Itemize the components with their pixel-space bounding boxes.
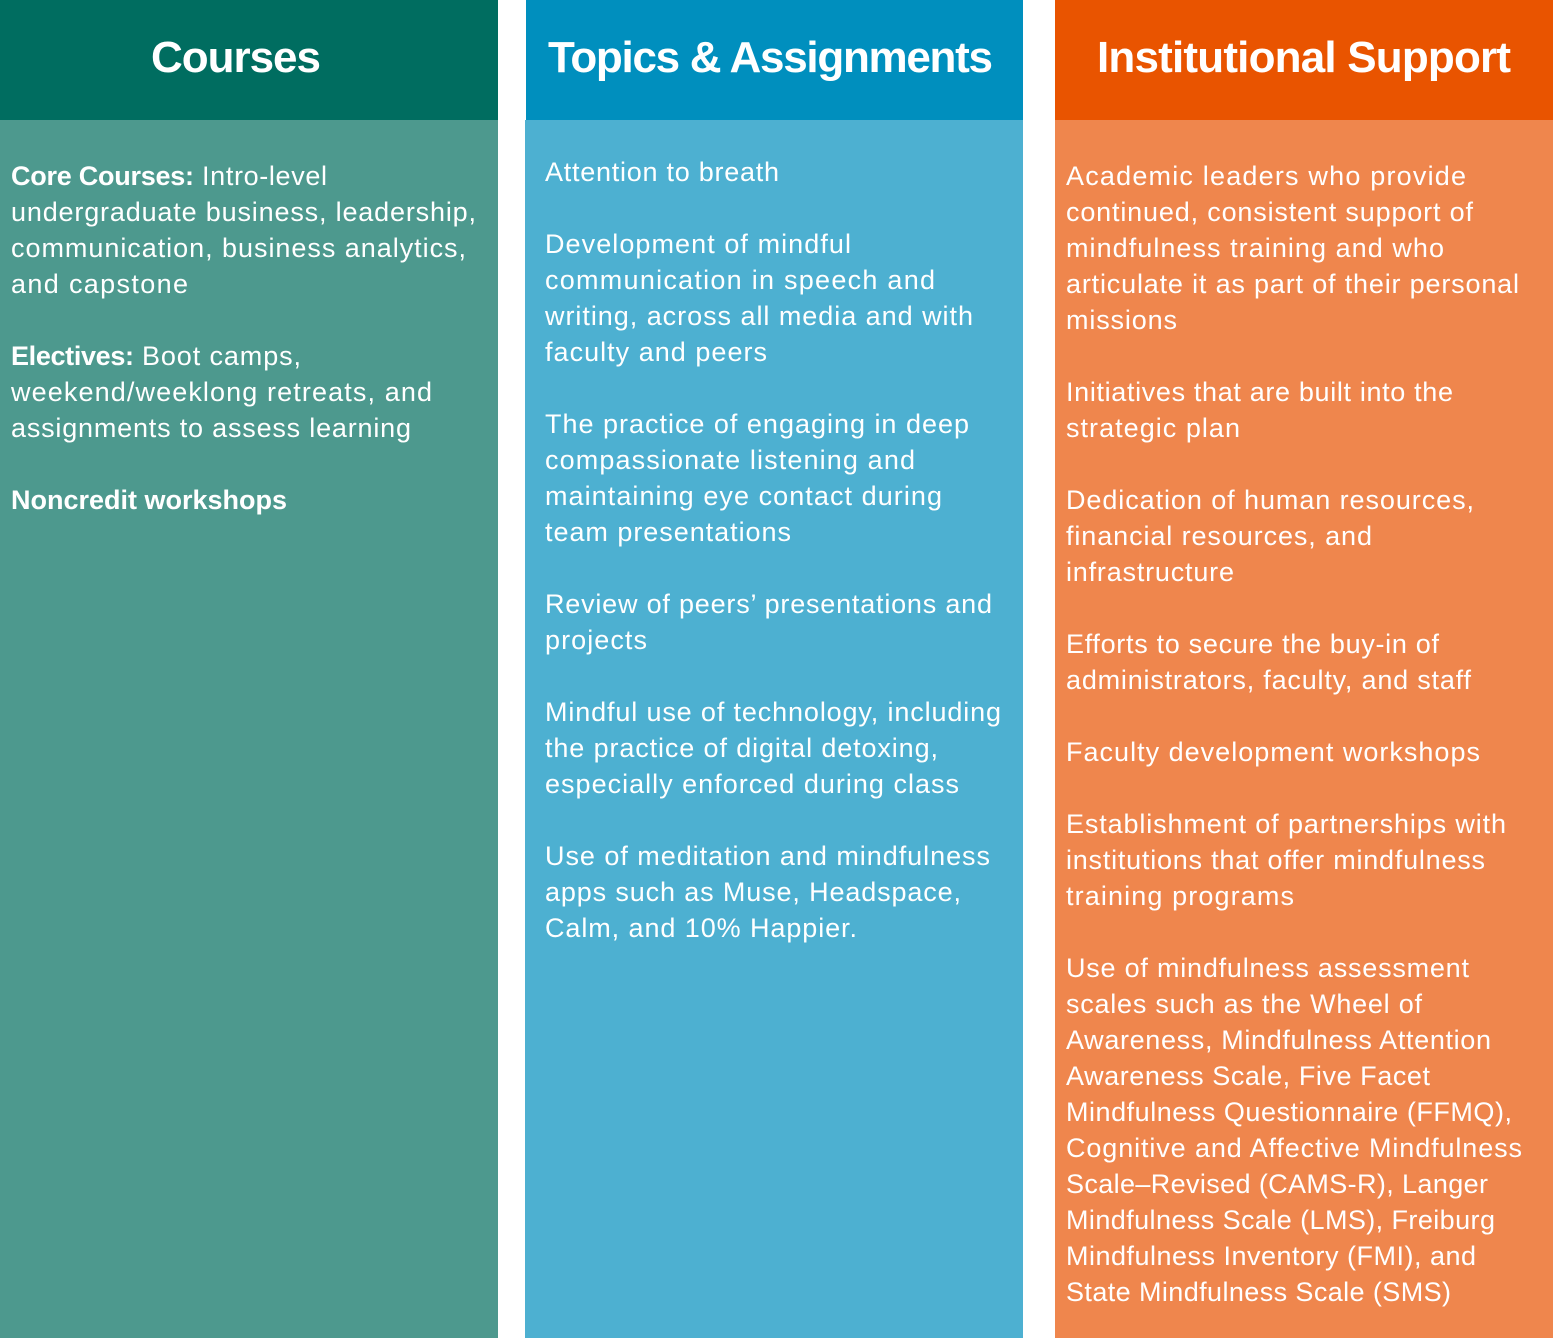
text: deep listening: maintaining eye contact during (545, 481, 942, 511)
text: assessment scales: Mindfulness Questionnaire (FFMQ), (1066, 1097, 1512, 1127)
text: core courses: Core Courses: (11, 161, 194, 191)
text: assessment scales: Awareness Scale, Five Facet (1066, 1061, 1430, 1091)
courses header band (0, 0, 498, 120)
text: deep listening: team presentations (545, 517, 791, 547)
text: strategic initiatives: Initiatives that are built into the (1066, 377, 1453, 407)
text: meditation apps: Use of meditation and mindfulness (545, 841, 990, 871)
text: mindful technology: the practice of digital detoxing, (545, 733, 938, 763)
text: mindful communication: communication in speech and (545, 265, 935, 295)
text: academic leaders: missions (1066, 305, 1177, 335)
heading: courses: Courses (151, 33, 321, 82)
text: academic leaders: articulate it as part of their personal (1066, 269, 1519, 299)
text: assessment scales: Use of mindfulness assessment (1066, 953, 1469, 983)
text: assessment scales (1066, 953, 1522, 1307)
text: attention to breath: Attention to breath (545, 157, 779, 187)
panel: courses (0, 0, 498, 1338)
support body background (1055, 120, 1553, 1338)
text: electives: Boot camps, (142, 341, 301, 371)
text: assessment scales: scales such as the Wheel of (1066, 989, 1422, 1019)
text: mindful technology: Mindful use of technology, including (545, 697, 1001, 727)
text: mindful communication (544, 229, 973, 367)
text: core courses (11, 161, 476, 299)
text: mindful technology: especially enforced during class (545, 769, 959, 799)
text: electives: assignments to assess learning (11, 413, 411, 443)
text: mindful technology (545, 697, 1001, 799)
topics header band (526, 0, 1023, 120)
text: academic leaders: continued, consistent support of (1066, 197, 1473, 227)
text: assessment scales: State Mindfulness Scale (SMS) (1066, 1277, 1451, 1307)
text: noncredit workshops: Noncredit workshops (11, 485, 287, 515)
text: partnerships: training programs (1066, 881, 1294, 911)
text: core courses: and capstone (11, 269, 188, 299)
text: resources: infrastructure (1066, 557, 1234, 587)
text: deep listening: compassionate listening and (545, 445, 915, 475)
text: core courses: undergraduate business, leadership, (11, 197, 476, 227)
text: academic leaders: mindfulness training and who (1066, 233, 1444, 263)
text: mindful communication: Development of mindful (545, 229, 851, 259)
text: electives: weekend/weeklong retreats, and (10, 377, 432, 407)
text: meditation apps: Calm, and 10% Happier. (545, 913, 857, 943)
text: academic leaders (1066, 161, 1519, 335)
text: meditation apps (545, 841, 990, 943)
support header band (1055, 0, 1553, 120)
text: core courses: Intro-level (202, 161, 327, 191)
text: electives (10, 341, 432, 443)
text: buy-in: administrators, faculty, and staff (1066, 665, 1471, 695)
text: academic leaders: Academic leaders who provide (1066, 161, 1466, 191)
text: partnerships (1066, 809, 1506, 911)
text: electives: Electives: (11, 341, 134, 371)
text: mindful communication: faculty and peers (545, 337, 767, 367)
text: strategic initiatives (1066, 377, 1453, 443)
text: deep listening (545, 409, 969, 547)
text: mindful communication: writing, across all media and with (544, 301, 973, 331)
text: core courses: communication, business analytics, (11, 233, 466, 263)
panel: topics and assignments (525, 0, 1023, 1338)
text: peer review: projects (545, 625, 647, 655)
text: assessment scales: Mindfulness Inventory (FMI), and (1066, 1241, 1476, 1271)
text: assessment scales: Mindfulness Scale (LMS), Freiburg (1066, 1205, 1495, 1235)
text: deep listening: The practice of engaging in deep (545, 409, 969, 439)
courses body background (0, 120, 498, 1338)
text: resources: financial resources, and (1066, 521, 1372, 551)
text: resources: Dedication of human resources, (1066, 485, 1474, 515)
heading: institutional support: Institutional Support (1097, 33, 1511, 82)
heading: topics and assignments: Topics & Assignments (548, 33, 993, 82)
text: faculty workshops: Faculty development workshops (1066, 737, 1480, 767)
text: assessment scales: Scale–Revised (CAMS-R), Langer (1066, 1169, 1488, 1199)
panel: institutional support (1055, 0, 1553, 1338)
text: peer review: Review of peers’ presentations and (545, 589, 992, 619)
text: resources (1066, 485, 1474, 587)
text: peer review (545, 589, 992, 655)
text: meditation apps: apps such as Muse, Headspace, (545, 877, 961, 907)
text: partnerships: institutions that offer mindfulness (1066, 845, 1485, 875)
text: buy-in (1066, 629, 1471, 695)
text: strategic initiatives: strategic plan (1066, 413, 1240, 443)
text: partnerships: Establishment of partnerships with (1066, 809, 1506, 839)
text: assessment scales: Awareness, Mindfulness Attention (1066, 1025, 1491, 1055)
text: assessment scales: Cognitive and Affective Mindfulness (1066, 1133, 1522, 1163)
text: buy-in: Efforts to secure the buy-in of (1066, 629, 1439, 659)
topics body background (525, 120, 1023, 1338)
